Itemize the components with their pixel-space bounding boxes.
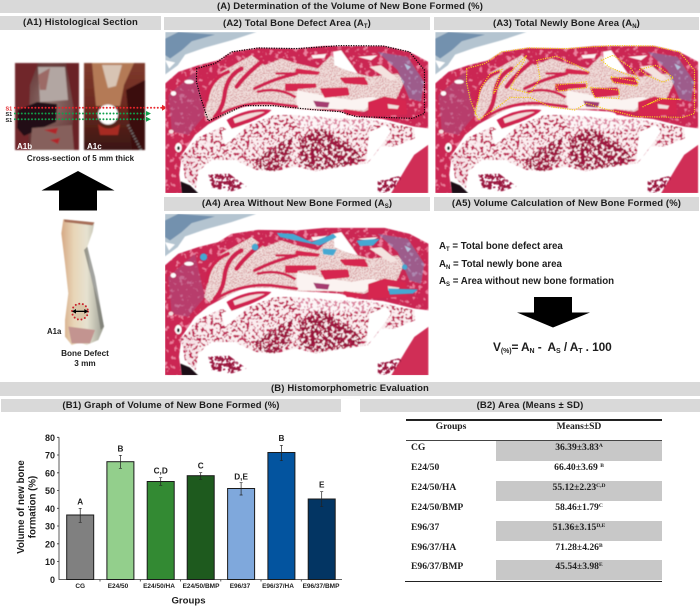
chart: volume of new bone formed bbox=[16, 433, 342, 606]
defect marker bbox=[72, 304, 88, 320]
row: E24/50 bbox=[411, 462, 604, 473]
row: E96/37/HA: 71.28±4.26B bbox=[555, 542, 603, 553]
new bone outline bbox=[466, 46, 694, 120]
heading: B1 bbox=[1, 399, 341, 412]
heading: A3 bbox=[434, 17, 699, 30]
row: CG: CG bbox=[411, 442, 425, 453]
x axis labels: E96/37 bbox=[230, 583, 251, 590]
table top rule bbox=[406, 419, 662, 420]
table header: Means±SD bbox=[557, 421, 601, 432]
heading: A1 histological section: (A1) Histological Section bbox=[23, 17, 138, 28]
x axis labels: E24/50 bbox=[108, 583, 129, 590]
cut lines bbox=[15, 105, 167, 122]
y axis ticks: 0 bbox=[50, 575, 55, 585]
x axis labels: CG bbox=[75, 583, 85, 590]
row: E96/37 bbox=[411, 521, 662, 541]
row: E96/37/BMP: 45.54±3.98E bbox=[555, 561, 603, 572]
significance letters bbox=[77, 434, 325, 506]
row: CG: 36.39±3.83A bbox=[555, 442, 603, 453]
table header bbox=[406, 420, 662, 441]
significance letters: C bbox=[198, 461, 204, 470]
y axis ticks: 80 bbox=[45, 433, 55, 443]
significance letters: C,D bbox=[154, 467, 168, 476]
heading: A5: (A5) Volume Calculation of New Bone Formed (%) bbox=[452, 198, 681, 209]
row: E24/50/HA: 55.12±2.23C,D bbox=[553, 482, 605, 493]
y axis ticks: 20 bbox=[45, 539, 55, 549]
bars bbox=[67, 452, 335, 580]
row: E24/50/HA: E24/50/HA bbox=[411, 482, 456, 493]
cut line labels: S1 bbox=[6, 112, 12, 118]
photo: A1a bone with defect bbox=[60, 218, 105, 346]
y axis ticks: 10 bbox=[45, 557, 55, 567]
image: A3 histology with new bone outline bbox=[435, 32, 699, 193]
y axis ticks bbox=[45, 433, 55, 585]
y axis title: Volume of new bone bbox=[16, 460, 27, 554]
legend: area definitions: AS = Area without new bone formation bbox=[439, 276, 614, 288]
photo panel: cross-section with cut lines bbox=[6, 62, 166, 152]
label: A1b: A1b bbox=[17, 142, 32, 151]
row: E96/37: E96/37 bbox=[411, 522, 439, 533]
x axis labels bbox=[75, 583, 340, 590]
label: A1a: A1a bbox=[47, 327, 61, 336]
heading: section B bbox=[0, 382, 700, 396]
row: E96/37/HA bbox=[411, 542, 603, 553]
heading: section B: (B) Histomorphometric Evaluation bbox=[271, 383, 429, 394]
x axis labels: E96/37/BMP bbox=[303, 583, 340, 590]
heading: A1 histological section bbox=[0, 16, 161, 30]
blue areas without new bone bbox=[200, 233, 418, 295]
table header: Groups bbox=[436, 421, 466, 432]
label: A1c: A1c bbox=[87, 142, 102, 151]
heading: B2: (B2) Area (Means ± SD) bbox=[477, 400, 583, 411]
image: A4 histology with blue areas bbox=[165, 214, 429, 376]
row: E24/50/BMP bbox=[411, 502, 603, 513]
heading: A4: (A4) Area Without New Bone Formed (AS) bbox=[202, 198, 392, 210]
y axis ticks: 40 bbox=[45, 504, 55, 514]
row: E24/50/BMP: 58.46±1.79C bbox=[555, 502, 603, 513]
heading: B2 bbox=[360, 399, 700, 412]
heading: section A: (A) Determination of the Volume of New Bone Formed (%) bbox=[217, 1, 483, 12]
row: E96/37/BMP: E96/37/BMP bbox=[411, 561, 463, 572]
heading: A4 bbox=[164, 197, 430, 211]
legend: area definitions: AN = Total newly bone area bbox=[439, 259, 562, 271]
caption: bone defect: 3 mm bbox=[74, 359, 96, 368]
row: E24/50: 66.40±3.69 B bbox=[554, 462, 604, 473]
heading: A5 bbox=[434, 197, 699, 211]
y axis title bbox=[16, 460, 38, 554]
significance letters: E bbox=[319, 481, 325, 490]
photo: A1c bbox=[84, 63, 145, 151]
caption: bone defect bbox=[61, 349, 109, 368]
y axis ticks: 60 bbox=[45, 468, 55, 478]
formula: V(%)= AN - AS / AT . 100 bbox=[493, 340, 612, 355]
x axis labels: E24/50/HA bbox=[143, 583, 175, 590]
significance letters: B bbox=[117, 444, 123, 453]
y axis ticks: 50 bbox=[45, 486, 55, 496]
arrow: down bbox=[517, 297, 590, 328]
axes bbox=[57, 437, 342, 582]
heading: section A bbox=[0, 0, 700, 13]
y axis title: formation (%) bbox=[28, 476, 38, 538]
cut line labels: S1 bbox=[6, 106, 12, 112]
significance letters: B bbox=[278, 434, 284, 443]
y axis ticks: 70 bbox=[45, 450, 55, 460]
x axis labels: E96/37/HA bbox=[262, 583, 294, 590]
y axis ticks: 30 bbox=[45, 522, 55, 532]
significance letters: D,E bbox=[234, 472, 248, 481]
legend: area definitions: AT = Total bone defect area bbox=[439, 241, 563, 253]
row: E24/50/HA bbox=[411, 481, 662, 501]
heading: A2 bbox=[164, 17, 430, 30]
significance letters: A bbox=[77, 497, 83, 506]
heading: A3: (A3) Total Newly Bone Area (AN) bbox=[493, 18, 640, 30]
caption: bone defect: Bone Defect bbox=[61, 349, 109, 358]
row: E96/37/BMP bbox=[411, 560, 662, 580]
photo: A1b bbox=[15, 63, 79, 151]
table: area means and SD bbox=[405, 419, 662, 582]
x axis title: Groups bbox=[171, 595, 206, 606]
defect outline bbox=[196, 46, 424, 121]
heading: B1: (B1) Graph of Volume of New Bone Formed (%) bbox=[62, 400, 280, 411]
row: CG bbox=[411, 441, 662, 461]
heading: A2: (A2) Total Bone Defect Area (AT) bbox=[223, 18, 371, 30]
row: E96/37: 51.36±3.15D,E bbox=[553, 522, 605, 533]
legend: area definitions bbox=[439, 241, 614, 288]
arrow: up bbox=[42, 171, 114, 210]
image: A2 histology with defect outline bbox=[165, 32, 429, 193]
x axis labels: E24/50/BMP bbox=[183, 583, 220, 590]
row: E24/50: E24/50 bbox=[411, 462, 439, 473]
cut line labels bbox=[6, 106, 12, 124]
row: E96/37/HA: E96/37/HA bbox=[411, 542, 456, 553]
error bars bbox=[79, 445, 323, 522]
cut line labels: S1 bbox=[6, 118, 12, 124]
table bottom rule bbox=[405, 580, 662, 582]
row: E24/50/BMP: E24/50/BMP bbox=[411, 502, 463, 513]
caption: cross-section: Cross-section of 5 mm thick bbox=[27, 154, 134, 163]
